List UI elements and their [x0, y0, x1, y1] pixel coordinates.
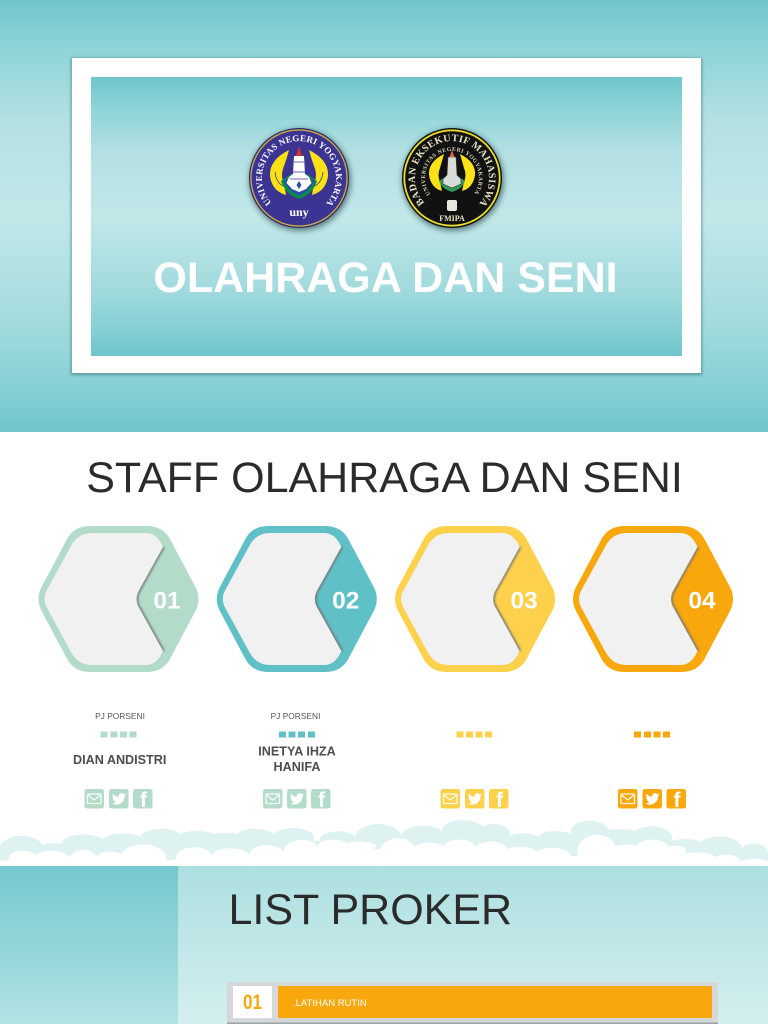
social icons: f: [318, 789, 326, 812]
dots: [279, 732, 315, 738]
staff card 1: [73, 711, 166, 812]
dots: [100, 732, 136, 738]
title: OLAHRAGA DAN SENI: [153, 254, 618, 302]
logo: Badan Eksekutif Mahasiswa: FMIPA: [439, 214, 465, 223]
staff card 3: [440, 732, 508, 812]
staff card 2: [258, 711, 336, 812]
hexagon 02: [217, 526, 377, 672]
logo: Universitas Negeri Yogyakarta: [245, 126, 355, 235]
name: HANIFA: [274, 760, 320, 774]
role label: PJ PORSENI: [95, 711, 145, 721]
dots: [634, 732, 670, 738]
name: [258, 744, 336, 774]
social icons: f: [140, 789, 148, 812]
number 03: 03: [510, 588, 538, 614]
hexagon 03: [395, 526, 555, 672]
item number: 01: [243, 991, 262, 1014]
role label: PJ PORSENI: [271, 711, 320, 721]
number 04: 04: [688, 588, 716, 614]
hexagon 04: [573, 526, 733, 672]
left accent: [0, 866, 178, 1024]
staff card 4: [618, 732, 686, 812]
cloud band: [0, 820, 768, 866]
social icons: f: [674, 789, 682, 812]
logo: Badan Eksekutif Mahasiswa: UNIVERSITAS NEGERI YOGYAKARTA: [421, 147, 483, 196]
title panel: [69, 56, 704, 377]
number 01: 01: [153, 588, 181, 614]
logo: Badan Eksekutif Mahasiswa: [398, 126, 508, 235]
heading: LIST PROKER: [228, 886, 512, 934]
dots: [456, 732, 492, 738]
number 02: 02: [332, 588, 359, 614]
staff heading: STAFF OLAHRAGA DAN SENI: [86, 454, 683, 502]
list item 01: [227, 982, 718, 1024]
social icons: f: [496, 789, 504, 812]
header background: [0, 0, 768, 432]
logo: Universitas Negeri Yogyakarta: uny: [289, 205, 309, 219]
hexagon 01: [38, 526, 198, 672]
right background: [178, 866, 768, 1024]
name: INETYA IHZA: [258, 744, 336, 758]
list proker section: [0, 866, 768, 1024]
logo: Badan Eksekutif Mahasiswa: BADAN EKSEKUTIF MAHASISWA: [408, 134, 496, 207]
name: DIAN ANDISTRI: [73, 753, 166, 767]
item text: .LATIHAN RUTIN: [293, 998, 367, 1009]
logo: Universitas Negeri Yogyakarta: UNIVERSITAS NEGERI YOGYAKARTA: [256, 135, 342, 206]
